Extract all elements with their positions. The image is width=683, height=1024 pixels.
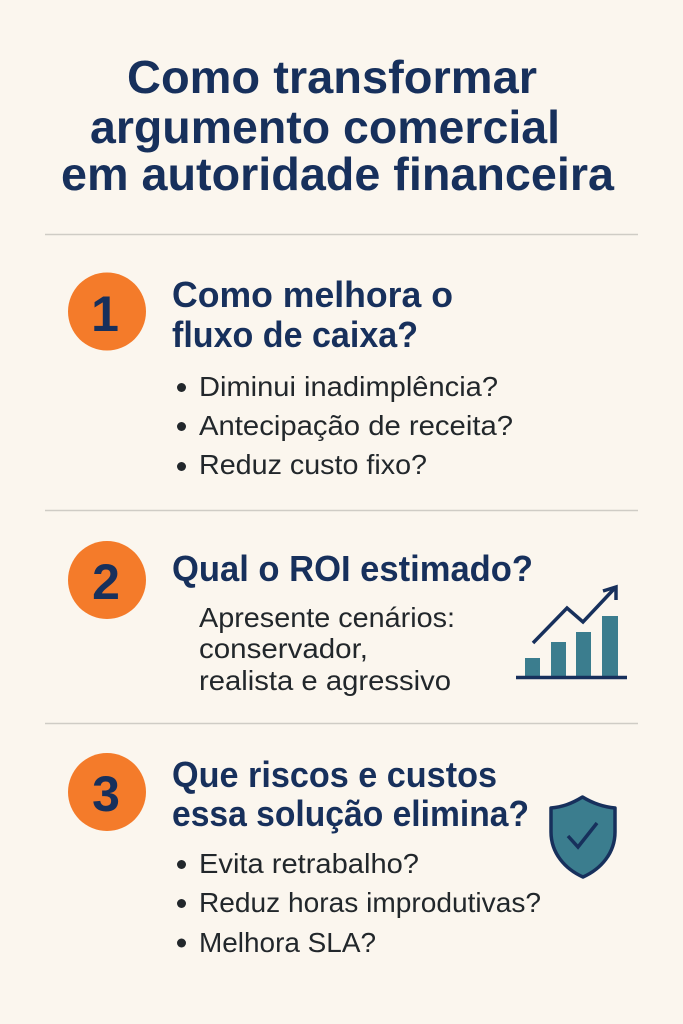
bullet list 3: Reduz horas improdutivas?	[199, 887, 541, 918]
heading 1: fluxo de caixa?	[172, 314, 418, 355]
number badge 1: 1	[91, 286, 119, 342]
description text	[199, 602, 455, 696]
bullet list 3	[177, 848, 541, 958]
panel: riscos e custos	[68, 753, 615, 958]
icon: shield with check	[551, 797, 615, 877]
panel: fluxo de caixa	[68, 272, 513, 480]
heading 1	[172, 274, 453, 355]
title	[61, 51, 614, 200]
title: argumento comercial	[90, 101, 560, 153]
description text: realista e agressivo	[199, 665, 451, 696]
heading 2: Qual o ROI estimado?	[172, 548, 533, 589]
number badge 2: 2	[92, 554, 120, 610]
bullet list 3: Evita retrabalho?	[199, 848, 419, 879]
bullet list 1: Reduz custo fixo?	[199, 449, 427, 480]
heading 3	[172, 754, 529, 834]
panel: ROI	[68, 541, 627, 696]
description text: conservador,	[199, 633, 368, 664]
title: em autoridade financeira	[61, 148, 614, 200]
number badge 2	[68, 541, 146, 619]
title: Como transformar	[127, 51, 537, 103]
bullet list 1: Antecipação de receita?	[199, 410, 513, 441]
description text: Apresente cenários:	[199, 602, 455, 633]
bullet list 1: Diminui inadimplência?	[199, 371, 498, 402]
icon: growth bar chart with arrow	[516, 587, 627, 678]
bullet list 1	[177, 371, 513, 480]
number badge 3: 3	[92, 766, 120, 822]
heading 3: essa solução elimina?	[172, 793, 529, 834]
heading 3: Que riscos e custos	[172, 754, 497, 795]
number badge 3	[68, 753, 146, 831]
bullet list 3: Melhora SLA?	[199, 927, 376, 958]
heading 1: Como melhora o	[172, 274, 453, 315]
number badge 1	[68, 272, 146, 350]
